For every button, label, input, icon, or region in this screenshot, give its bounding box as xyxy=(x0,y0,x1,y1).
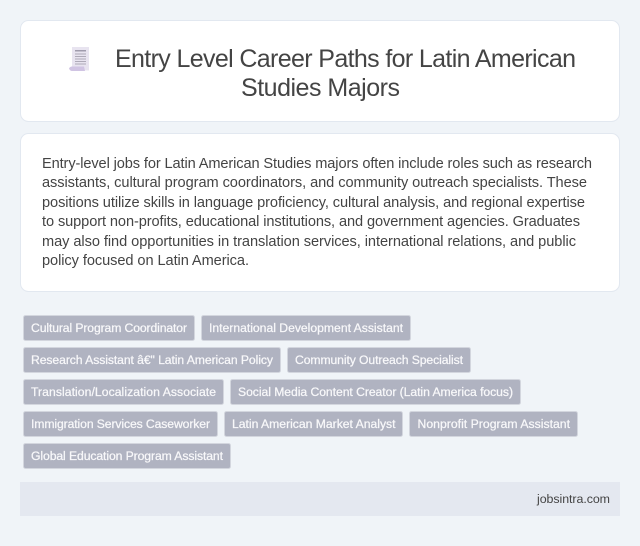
tag: Translation/Localization Associate: Translation/Localization Associate xyxy=(31,385,216,399)
tag: Latin American Market Analyst: Latin American Market Analyst xyxy=(232,417,396,431)
tag: Research Assistant: Research Assistant â€" Latin American Policy xyxy=(31,353,274,367)
description text: Entry-level jobs for Latin American Studies majors often include roles such as research xyxy=(42,156,592,172)
description text: to support non-profits, educational institutions, and government agencies. Graduates xyxy=(42,214,580,230)
tag: International Development Assistant: International Development Assistant xyxy=(209,321,404,335)
tag: Social Media Content Creator: Social Media Content Creator (Latin America focus) xyxy=(238,385,513,399)
panel: description card xyxy=(20,134,620,292)
description text: positions utilize skills in language proficiency, cultural analysis, and regional expertise xyxy=(42,195,585,211)
title xyxy=(115,45,576,102)
footer source text: jobsintra.com xyxy=(536,492,610,506)
tag: Global Education Program Assistant: Global Education Program Assistant xyxy=(31,449,224,463)
tag: Nonprofit Program Assistant xyxy=(410,412,578,436)
description text xyxy=(42,156,592,269)
tag: Nonprofit Program Assistant: Nonprofit Program Assistant xyxy=(418,417,571,431)
tag: Latin American Market Analyst xyxy=(224,412,402,436)
tag: Research Assistant xyxy=(24,348,280,372)
tag: Global Education Program Assistant xyxy=(24,444,230,468)
tag: Cultural Program Coordinator: Cultural Program Coordinator xyxy=(31,321,187,335)
tag: Community Outreach Specialist xyxy=(288,348,470,372)
description text: assistants, cultural program coordinators, and community outreach specialists. These xyxy=(42,175,587,191)
panel: title card xyxy=(20,20,620,122)
tag: Cultural Program Coordinator xyxy=(24,316,194,340)
description text: policy focused on Latin America. xyxy=(42,253,249,269)
job tags xyxy=(24,316,578,468)
tag: Social Media Content Creator xyxy=(230,380,520,404)
description text: may also find opportunities in translation services, international relations, and public xyxy=(42,234,576,250)
tag: International Development Assistant xyxy=(202,316,410,340)
tag: Community Outreach Specialist: Community Outreach Specialist xyxy=(295,353,464,367)
title: Entry Level Career Paths for Latin American xyxy=(115,45,576,73)
tag: Translation/Localization Associate xyxy=(24,380,224,404)
tag: Immigration Services Caseworker: Immigration Services Caseworker xyxy=(31,417,210,431)
footer bar xyxy=(20,482,620,516)
tag: Immigration Services Caseworker xyxy=(24,412,218,436)
title: Studies Majors xyxy=(241,74,400,102)
icon: paper scroll xyxy=(69,47,89,71)
